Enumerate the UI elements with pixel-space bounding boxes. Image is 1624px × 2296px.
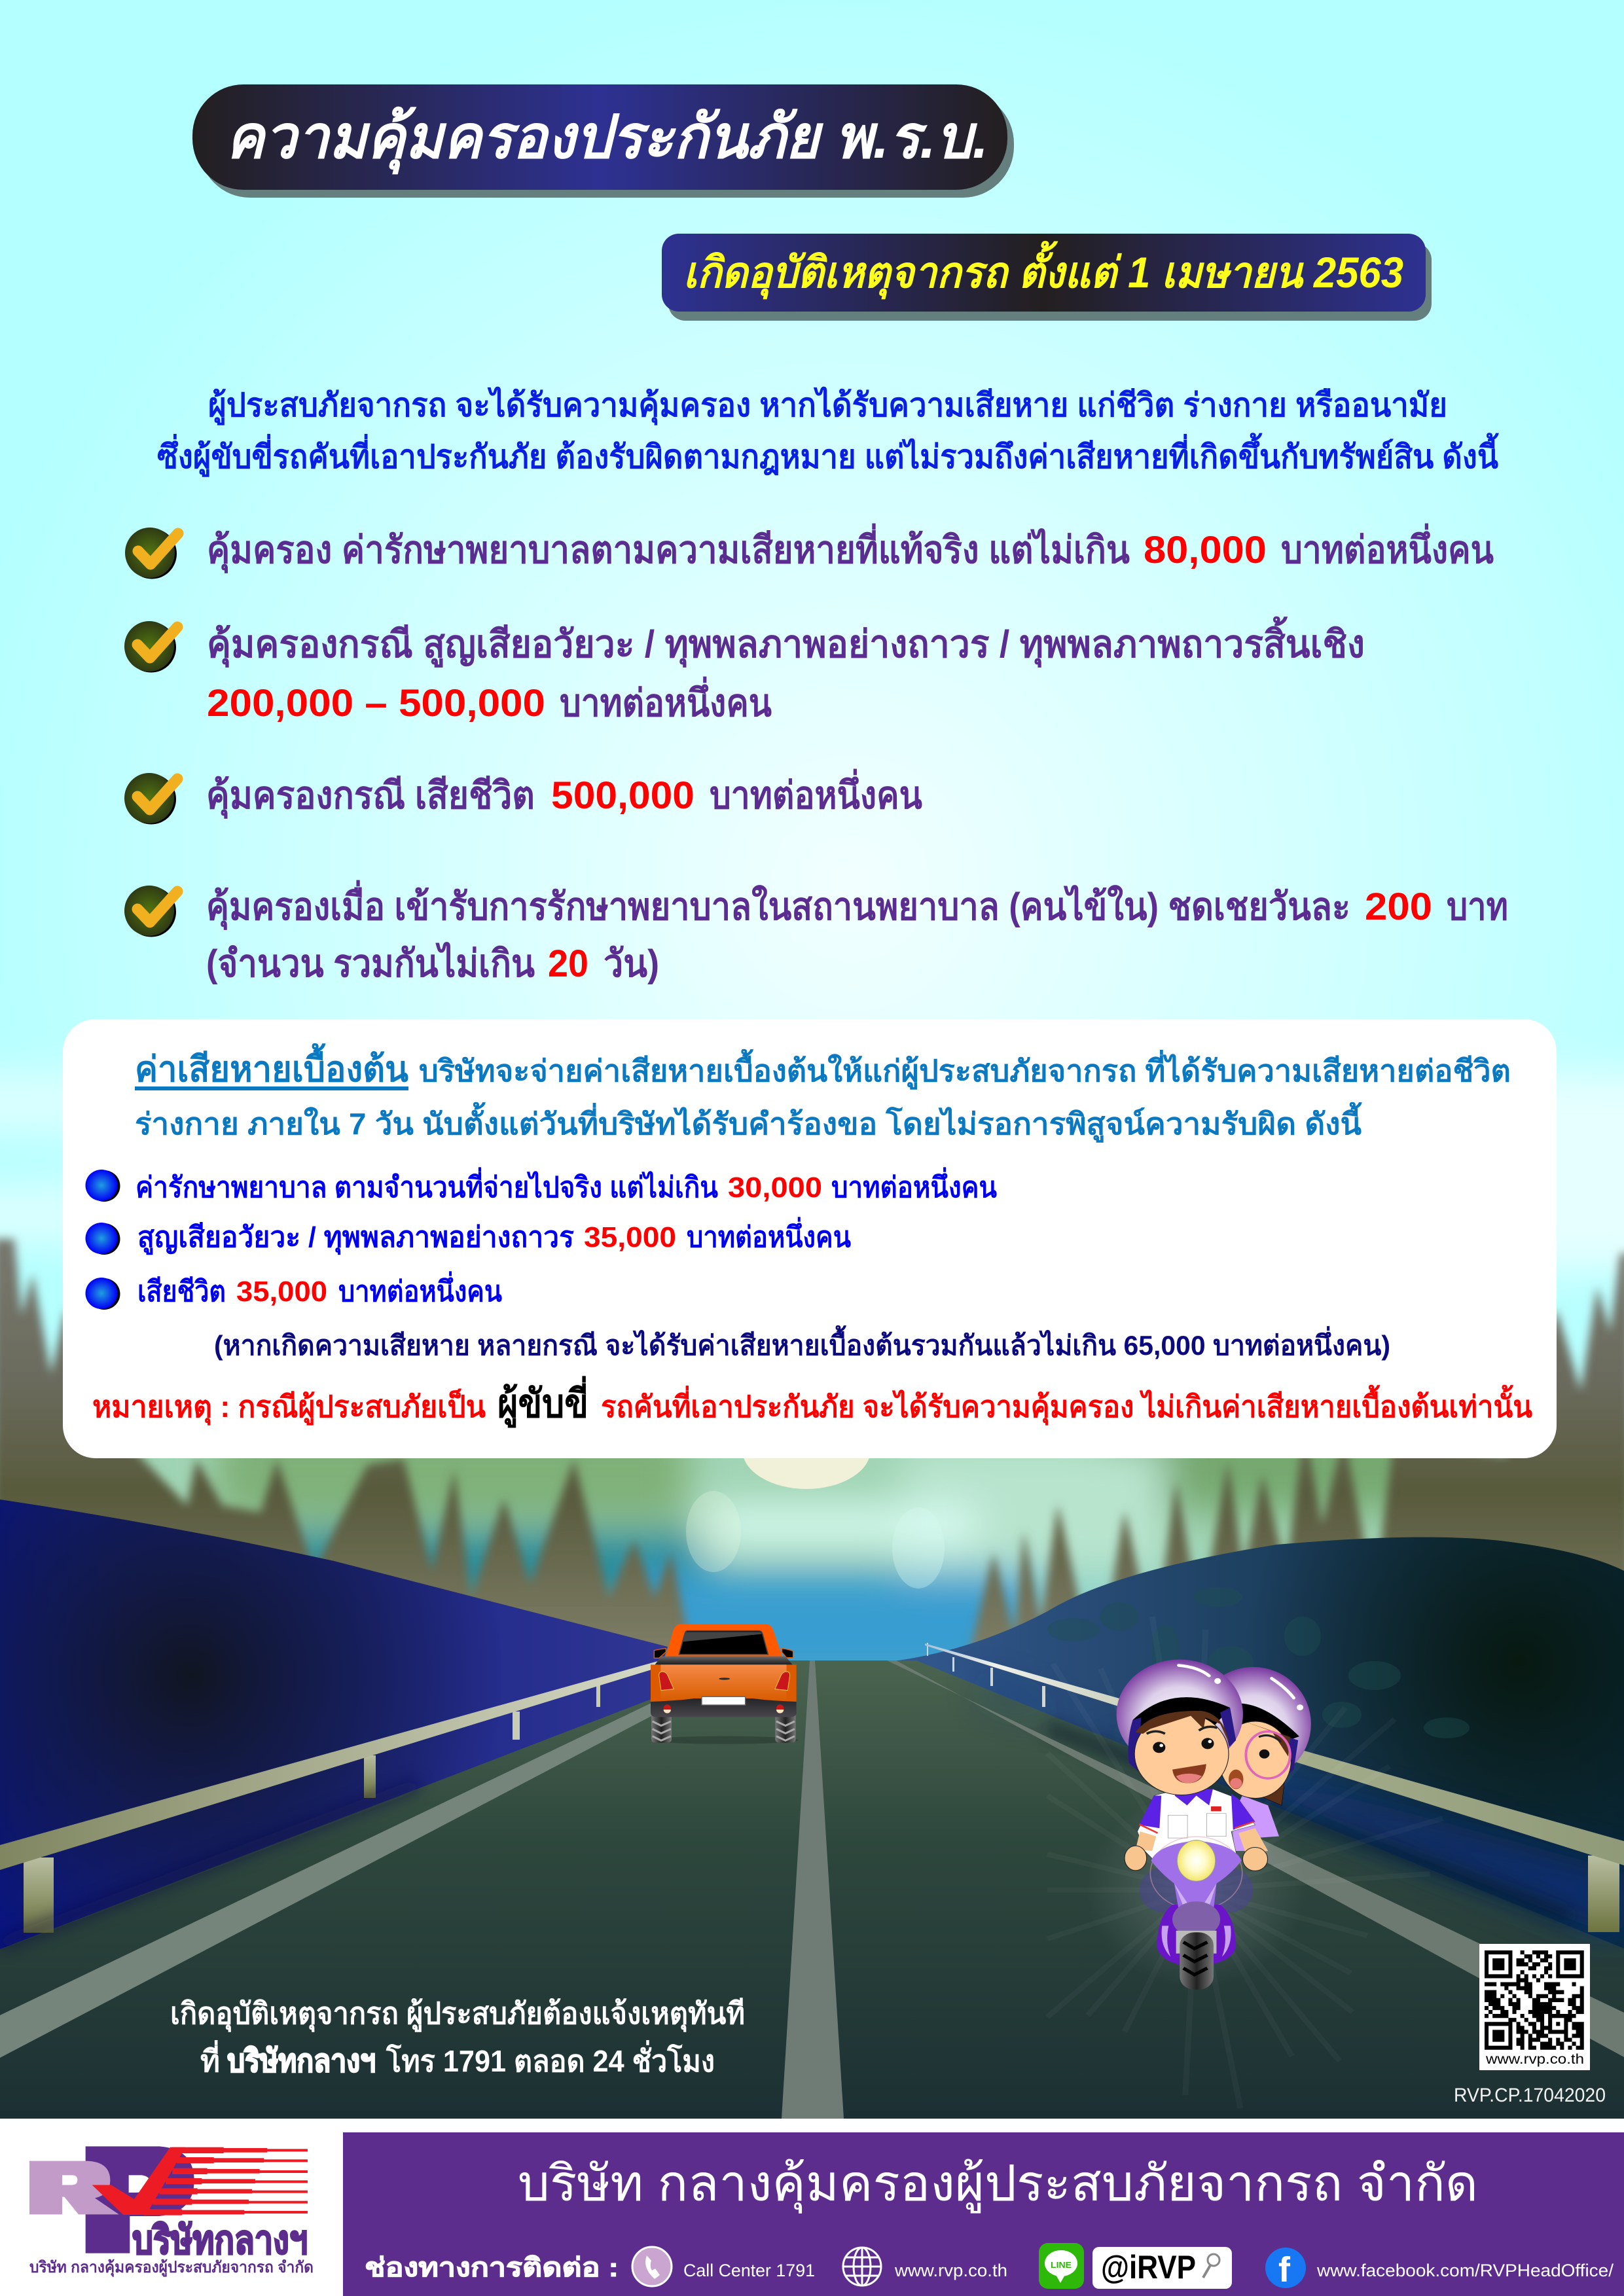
QR code: www.rvp.co.th	[1485, 2052, 1584, 2067]
coverage item: disability: บาทต่อหนึ่งคน	[560, 676, 772, 725]
coverage item: death: บาทต่อหนึ่งคน	[710, 768, 922, 817]
list item: death: เสียชีวิต	[137, 1276, 226, 1308]
panel heading	[135, 1043, 1511, 1143]
company name: บริษัท กลางคุ้มครองผู้ประสบภัยจากรถ จำกัด	[518, 2156, 1478, 2214]
coverage item: medical expenses	[125, 523, 1494, 579]
logo: RVP: บริษัท กลางคุ้มครองผู้ประสบภัยจากรถ จำกัด	[29, 2259, 314, 2278]
footer band: www.rvp.co.th	[894, 2261, 1007, 2280]
list item: death: 35,000	[236, 1276, 327, 1308]
icon: blue bullet	[85, 1223, 120, 1255]
footer background	[0, 2119, 1624, 2296]
hotline notice	[170, 1996, 745, 2079]
list item: disability: 35,000	[584, 1221, 676, 1253]
panel: preliminary compensation	[63, 1019, 1557, 1458]
list item: disability: บาทต่อหนึ่งคน	[687, 1217, 851, 1253]
logo: RVP: บริษัทกลางฯ	[132, 2218, 308, 2262]
pickup truck	[650, 1624, 799, 1744]
coverage item: inpatient compensation: วัน)	[604, 942, 659, 985]
coverage item: death	[124, 768, 922, 825]
right guard rail	[925, 1643, 1624, 1932]
panel heading: ค่าเสียหายเบื้องต้น	[135, 1043, 408, 1089]
road surface	[0, 1660, 1624, 2119]
icon: globe	[843, 2248, 881, 2286]
icon: LINE: LINE	[1051, 2260, 1072, 2270]
footer band	[343, 2132, 1624, 2296]
back passenger	[1195, 1667, 1311, 1851]
date pill	[662, 234, 1432, 321]
intro paragraph: ซึ่งผู้ขับขี่รถคันที่เอาประกันภัย ต้องรับผิดตามกฎหมาย แต่ไม่รวมถึงค่าเสียหายที่เกิดขึ้นกับทรัพย์สิน ดังนี้	[157, 433, 1499, 477]
panel heading: ร่างกาย ภายใน 7 วัน นับตั้งแต่วันที่บริษัทได้รับคำร้องขอ โดยไม่รอการพิสูจน์ความรับผิด ดังนี้	[135, 1102, 1362, 1143]
right roadside hill	[898, 1537, 1624, 1948]
coverage item: inpatient compensation: บาท	[1447, 886, 1508, 928]
coverage item: disability	[124, 617, 1365, 725]
road lane markings	[0, 1660, 1624, 2119]
cap note: (หากเกิดความเสียหาย หลายกรณี จะได้รับค่าเสียหายเบื้องต้นรวมกันแล้วไม่เกิน 65,000 บาทต่อหนึ่งคน)	[214, 1325, 1390, 1361]
remark	[92, 1376, 1533, 1428]
list item: death	[85, 1271, 502, 1310]
icon: check mark	[124, 773, 177, 825]
footer band: Call Center 1791	[683, 2261, 815, 2280]
title pill	[192, 84, 1014, 198]
list item: disability: สูญเสียอวัยวะ / ทุพพลภาพอย่างถาวร	[137, 1221, 574, 1255]
icon: Facebook: f	[1278, 2250, 1291, 2289]
motorcycle	[1125, 1837, 1268, 1990]
icon: check mark	[124, 621, 177, 673]
hotline notice: โทร 1791 ตลอด 24 ชั่วโมง	[386, 2040, 715, 2078]
hotline notice: เกิดอุบัติเหตุจากรถ ผู้ประสบภัยต้องแจ้งเหตุทันที	[170, 1996, 745, 2032]
document code: RVP.CP.17042020	[1454, 2085, 1606, 2106]
icon: check mark	[124, 886, 177, 937]
hotline notice: บริษัทกลางฯ	[227, 2044, 376, 2079]
remark: ผู้ขับขี่	[497, 1376, 588, 1428]
intro paragraph	[157, 386, 1499, 477]
icon: phone	[632, 2247, 672, 2286]
LINE ID badge: @iRVP	[1101, 2249, 1196, 2286]
background: landscape behind the road	[0, 1073, 1624, 1689]
left guard rail	[0, 1661, 658, 1944]
list item: death: บาทต่อหนึ่งคน	[338, 1271, 502, 1308]
coverage item: medical expenses: คุ้มครอง ค่ารักษาพยาบาลตามความเสียหายที่แท้จริง แต่ไม่เกิน	[207, 523, 1130, 574]
list item: disability	[85, 1217, 851, 1255]
coverage item: medical expenses: บาทต่อหนึ่งคน	[1281, 523, 1494, 571]
title pill: ความคุ้มครองประกันภัย พ.ร.บ.	[226, 104, 988, 175]
coverage item: disability: 200,000 – 500,000	[207, 682, 545, 725]
hotline notice: ที่	[200, 2040, 220, 2078]
logo: RVP	[29, 2146, 314, 2278]
left roadside hill	[0, 1499, 668, 1949]
headlight rays	[1047, 1617, 1443, 2108]
coverage item: inpatient compensation: 200	[1365, 886, 1432, 928]
LINE ID badge	[1092, 2247, 1232, 2289]
remark: หมายเหตุ : กรณีผู้ประสบภัยเป็น	[92, 1388, 486, 1426]
coverage item: death: 500,000	[551, 774, 695, 817]
footer band: www.facebook.com/RVPHeadOffice/	[1316, 2261, 1614, 2280]
date pill: เกิดอุบัติเหตุจากรถ ตั้งแต่ 1 เมษายน 2563	[683, 241, 1403, 300]
icon: blue bullet	[85, 1170, 120, 1202]
coverage item: inpatient compensation: 20	[548, 942, 588, 985]
remark: รถคันที่เอาประกันภัย จะได้รับความคุ้มครอง ไม่เกินค่าเสียหายเบื้องต้นเท่านั้น	[601, 1384, 1533, 1426]
contact label: ช่องทางการติดต่อ :	[365, 2253, 619, 2282]
coverage item: inpatient compensation: คุ้มครองเมื่อ เข้ารับการรักษาพยาบาลในสถานพยาบาล (คนไข้ใน) ชดเชยวันละ	[206, 880, 1350, 931]
riders on purple motorcycle	[1047, 1617, 1443, 2108]
QR code	[1479, 1944, 1590, 2070]
intro paragraph: ผู้ประสบภัยจากรถ จะได้รับความคุ้มครอง หากได้รับความเสียหาย แก่ชีวิต ร่างกาย หรืออนามัย	[208, 386, 1447, 425]
coverage item: inpatient compensation: (จำนวน รวมกันไม่เกิน	[206, 942, 535, 985]
background: trees	[0, 1239, 1624, 1662]
icon: Facebook	[1265, 2248, 1306, 2289]
icon: LINE	[1039, 2243, 1084, 2289]
coverage item: inpatient compensation	[124, 880, 1508, 985]
list item: medical: บาทต่อหนึ่งคน	[831, 1167, 997, 1204]
coverage item: death: คุ้มครองกรณี เสียชีวิต	[206, 774, 535, 819]
coverage item: medical expenses: 80,000	[1144, 529, 1267, 571]
icon: blue bullet	[85, 1278, 120, 1310]
coverage item: disability: คุ้มครองกรณี สูญเสียอวัยวะ / ทุพพลภาพอย่างถาวร / ทุพพลภาพถาวรสิ้นเชิง	[207, 617, 1365, 668]
list item: medical	[85, 1167, 997, 1204]
panel heading: บริษัทจะจ่ายค่าเสียหายเบื้องต้นให้แก่ผู้ประสบภัยจากรถ ที่ได้รับความเสียหายต่อชีวิต	[419, 1049, 1511, 1090]
list item: medical: 30,000	[728, 1172, 822, 1204]
background: sky	[0, 0, 1624, 1676]
front rider	[1117, 1660, 1268, 1864]
icon: check mark	[125, 528, 178, 579]
list item: medical: ค่ารักษาพยาบาล ตามจำนวนที่จ่ายไปจริง แต่ไม่เกิน	[135, 1167, 718, 1204]
